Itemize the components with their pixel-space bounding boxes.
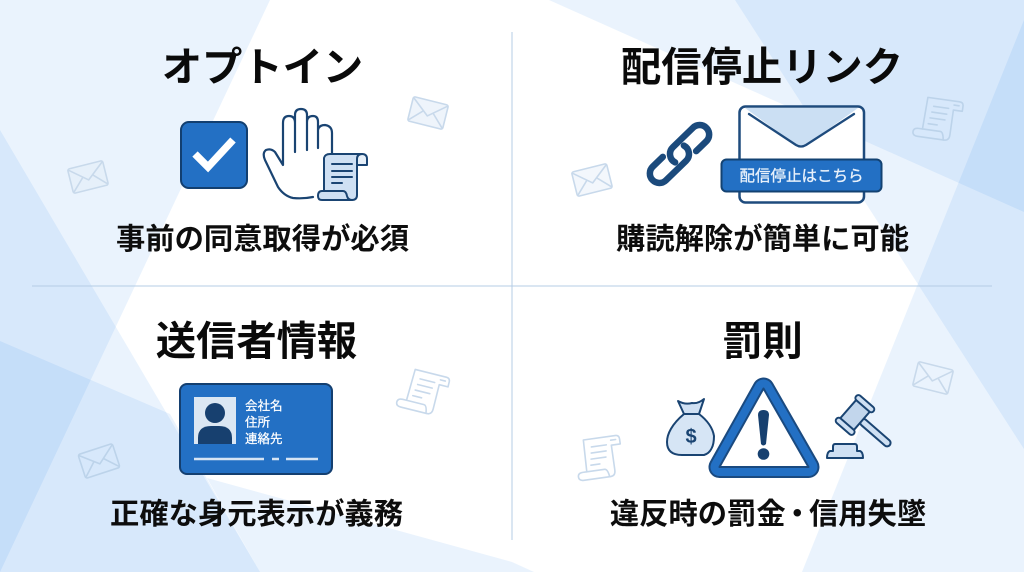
icon: id card <box>180 384 332 474</box>
icon: checkbox <box>181 122 247 188</box>
background icon: envelope left <box>68 161 108 193</box>
background icon: scroll bottom-right quadrant <box>573 435 625 481</box>
icon: raised hand <box>264 109 332 198</box>
panel: sender information <box>110 319 403 531</box>
background icon: envelope top-right quadrant <box>572 164 612 196</box>
button: unsubscribe here: 配信停止はこちら <box>739 167 864 185</box>
heading: unsubscribe link: 配信停止リンク <box>621 45 903 90</box>
panel: opt-in <box>116 45 409 256</box>
background icon: envelope bottom-left <box>78 444 120 478</box>
icon: envelope <box>740 106 864 202</box>
subheading: opt-in: 事前の同意取得が必須 <box>116 222 409 256</box>
icon: scroll document <box>318 154 367 200</box>
button: unsubscribe here <box>722 160 882 192</box>
background icon: envelope top centre-left <box>408 97 448 129</box>
subheading: unsubscribe link: 購読解除が簡単に可能 <box>616 222 909 256</box>
id card photo <box>194 397 236 444</box>
icon: gavel <box>827 394 902 459</box>
icon: money bag <box>667 399 714 455</box>
panel: unsubscribe link <box>616 45 909 256</box>
heading: opt-in: オプトイン <box>162 45 363 90</box>
icon: chain link <box>646 121 713 187</box>
id card text <box>245 398 283 446</box>
panel: penalties <box>610 319 926 531</box>
id card text: 連絡先 <box>245 432 283 446</box>
background icon: envelope bottom-right <box>913 362 953 394</box>
icon: warning triangle <box>720 388 808 467</box>
subheading: sender information: 正確な身元表示が義務 <box>110 497 403 531</box>
id card text: 住所 <box>245 416 271 430</box>
heading: sender information: 送信者情報 <box>156 319 357 364</box>
heading: penalties: 罰則 <box>722 319 803 364</box>
subheading: penalties: 違反時の罰金・信用失墜 <box>610 498 926 531</box>
background icon: scroll top-right <box>912 96 964 142</box>
background icon: scroll centre bottom-left <box>396 367 450 417</box>
icon: money bag: $ <box>685 426 697 448</box>
id card text: 会社名 <box>245 398 283 413</box>
